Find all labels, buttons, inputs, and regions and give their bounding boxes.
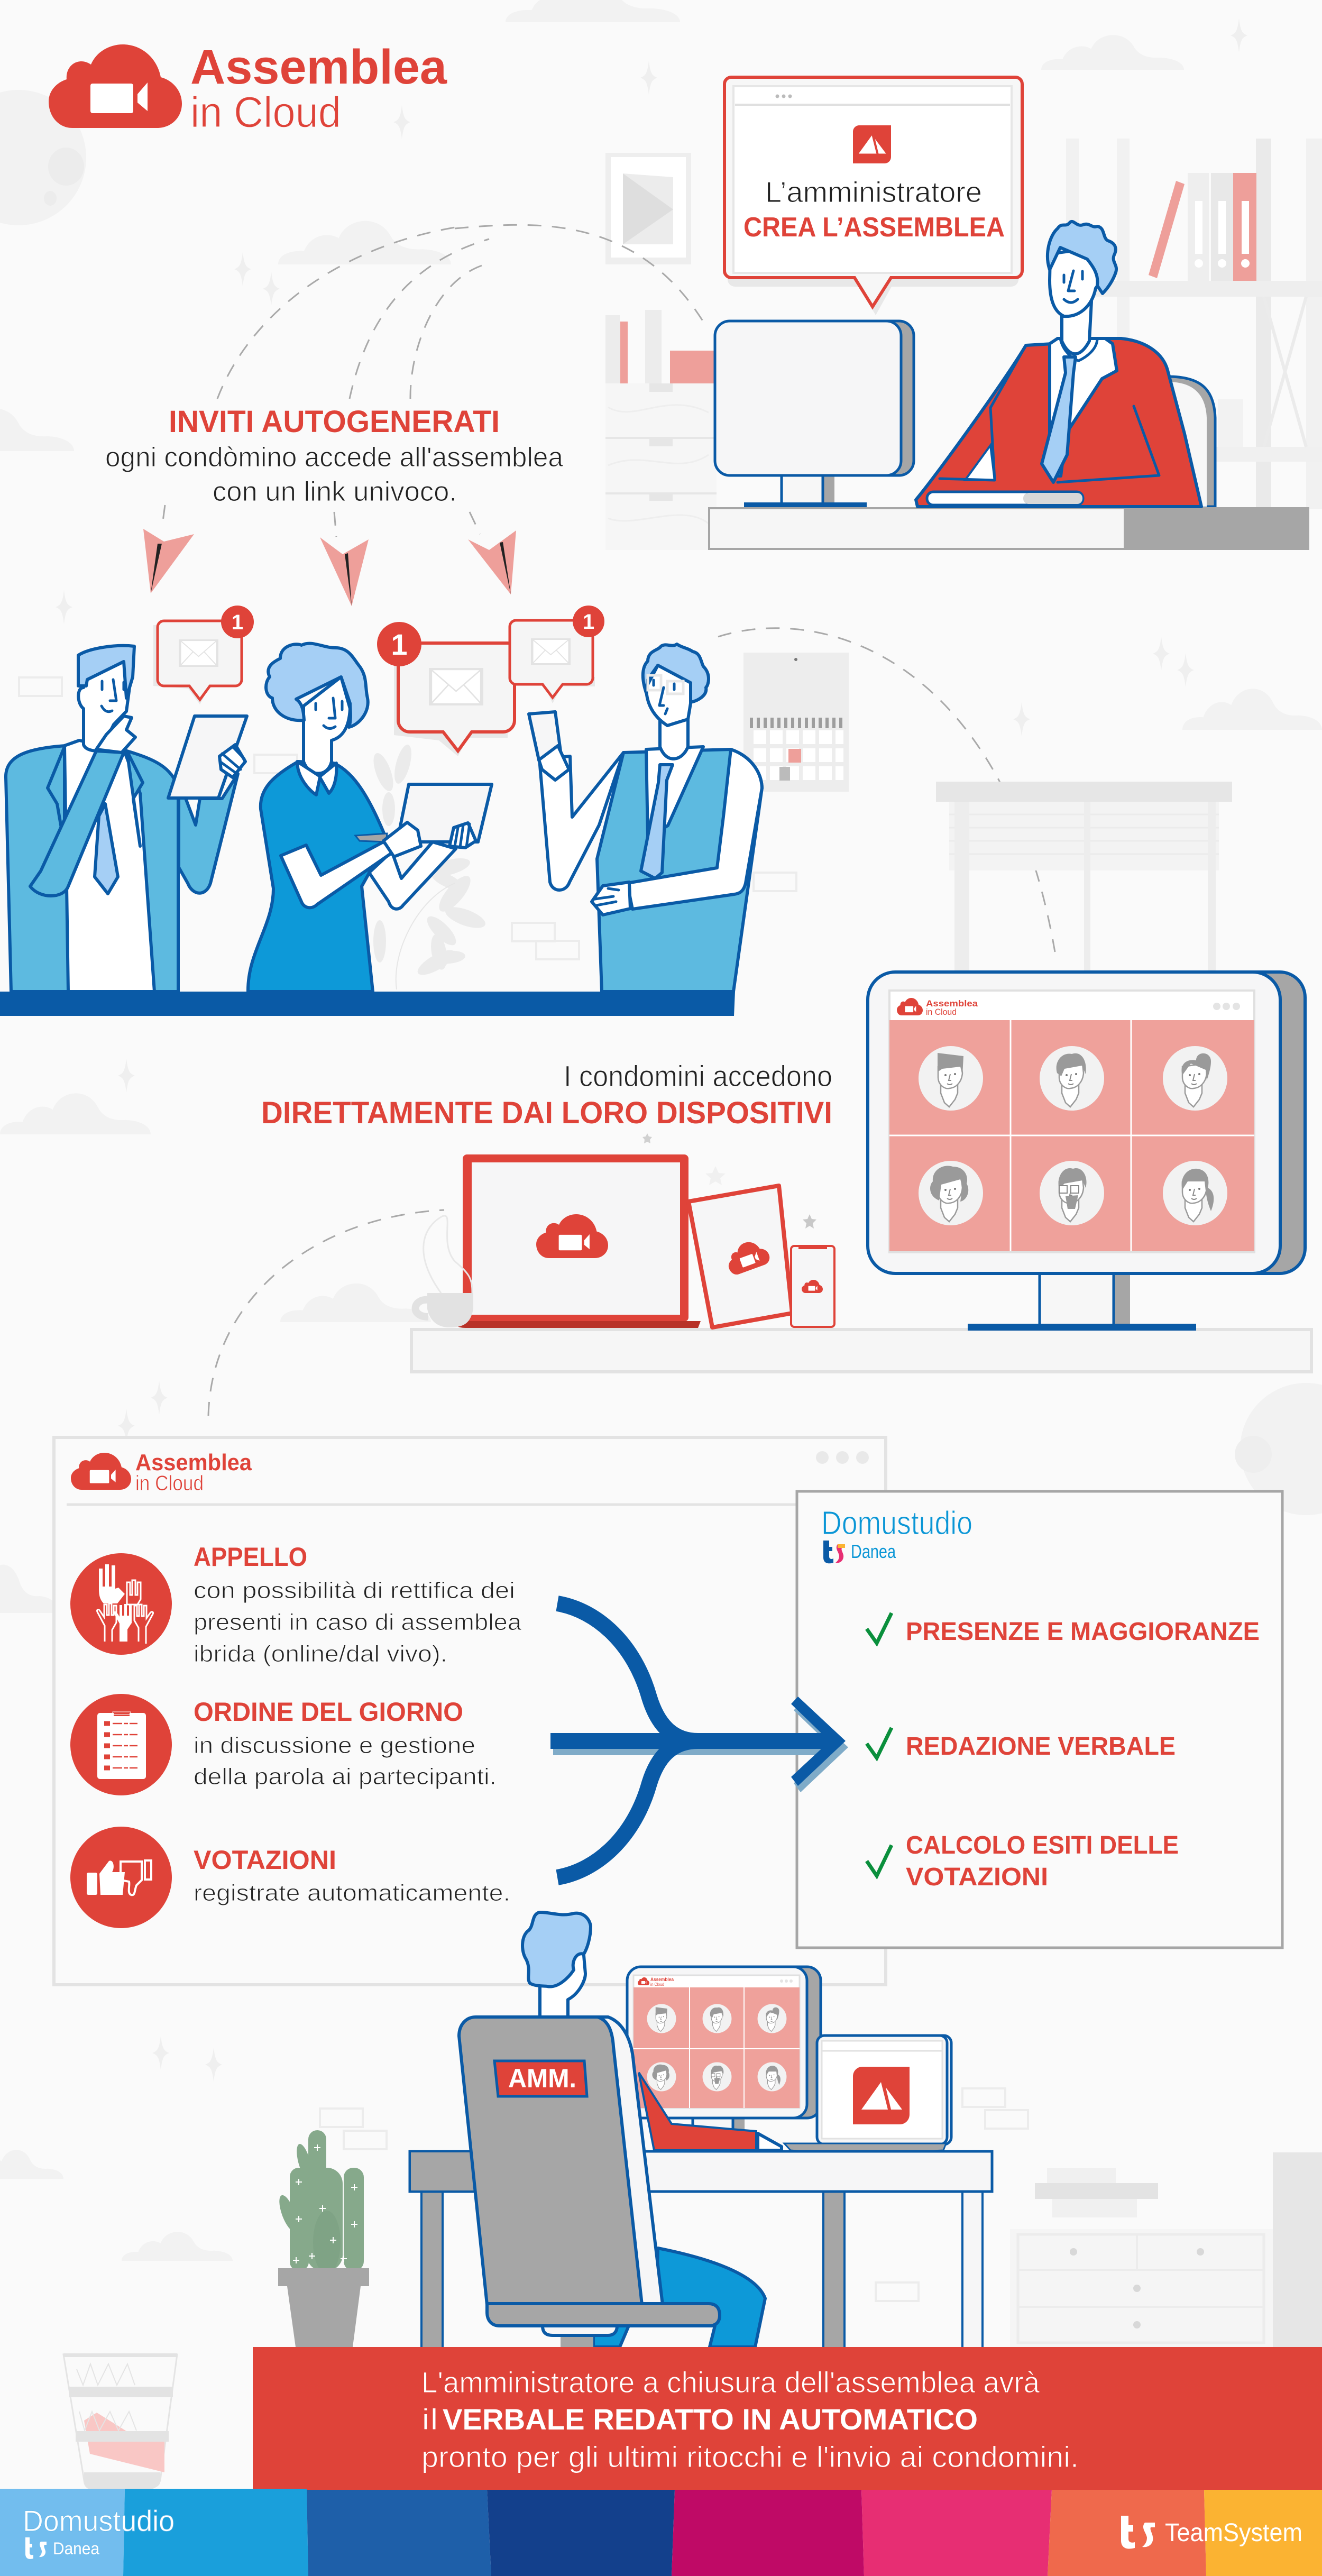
mini logo — [897, 998, 978, 1017]
panel: Assemblea in Cloud window — [54, 1437, 886, 1985]
raised arm — [30, 751, 124, 896]
administrator at desk with monitor — [708, 222, 1309, 550]
arms — [369, 842, 456, 909]
logo: Assemblea in Cloud — [49, 40, 447, 136]
head — [660, 717, 688, 759]
checklist: verbale: REDAZIONE VERBALE — [906, 1732, 1176, 1761]
right arm — [627, 749, 762, 909]
text: devices heading: DIRETTAMENTE DAI LORO DISPOSITIVI — [261, 1096, 832, 1130]
Domustudio logo: Danea — [851, 1541, 896, 1562]
tie — [95, 804, 118, 894]
item: appello: ibrida (online/dal vivo). — [194, 1641, 447, 1667]
item: appello: presenti in caso di assemblea — [194, 1609, 522, 1635]
mini logo: in Cloud — [926, 1007, 957, 1017]
devices: laptop, tablet, phone, cup — [416, 1133, 834, 1328]
item: appello — [194, 1542, 522, 1667]
icon: thumbs up and down — [70, 1827, 172, 1928]
stand — [1039, 1272, 1130, 1325]
icon: raised hands — [70, 1553, 172, 1655]
notification bubble 2 — [377, 622, 515, 756]
tie — [1042, 357, 1076, 482]
right sleeve — [179, 774, 238, 893]
item: appello: con possibilità di rettifica dei — [194, 1578, 515, 1603]
speech bubble: administrator creates assembly — [724, 77, 1022, 315]
neck and hair — [540, 1949, 585, 2017]
desk scene: administrator from behind — [410, 1912, 992, 2348]
item: ordine del giorno: della parola ai partecipanti. — [194, 1764, 497, 1790]
banner text: VERBALE REDATTO IN AUTOMATICO — [443, 2403, 978, 2436]
phone — [529, 712, 562, 760]
logo: Assemblea in Cloud: Assemblea — [190, 40, 447, 94]
mini logo: Assemblea — [926, 998, 978, 1009]
banner text: L'amministratore a chiusura dell'assemblea avrà — [421, 2366, 1040, 2399]
item: ordine del giorno: in discussione e gestione — [194, 1732, 475, 1758]
footer logo: Domustudio Danea: Danea — [53, 2539, 99, 2558]
footer logo: Domustudio Danea: Domustudio — [23, 2504, 175, 2537]
hand — [219, 745, 245, 777]
desk — [708, 507, 1309, 550]
checklist: esiti: VOTAZIONI — [906, 1863, 1048, 1891]
tablet — [397, 784, 492, 842]
monitor — [627, 1967, 821, 2131]
Domustudio logo — [821, 1505, 972, 1563]
phone — [791, 1246, 834, 1327]
notification bubble 1: 1 — [232, 611, 243, 634]
desk — [411, 1330, 1311, 1372]
head — [78, 662, 130, 751]
bubble text: CREA L’ASSEMBLEA — [743, 212, 1005, 243]
trousers — [656, 2248, 765, 2347]
notification bubble 3 — [510, 606, 604, 703]
logo: Assemblea in Cloud: in Cloud — [190, 88, 341, 136]
monitor — [715, 321, 914, 507]
notification bubble 1 — [153, 606, 254, 704]
plant: cactus in pot — [276, 2130, 369, 2347]
item: appello: APPELLO — [194, 1542, 307, 1572]
background plant, calendar and blinds — [370, 653, 1232, 989]
footer logo: TeamSystem: TeamSystem — [1165, 2519, 1302, 2547]
hair — [1048, 222, 1116, 294]
panel logo: Assemblea — [135, 1450, 252, 1475]
banner: closing message — [253, 2347, 1322, 2490]
item: ordine del giorno — [194, 1697, 497, 1790]
banner text: pronto per gli ultimi ritocchi e l'invio ai condomini. — [421, 2440, 1079, 2473]
item: votazioni: registrate automaticamente. — [194, 1880, 510, 1906]
tie — [641, 765, 673, 878]
panel: Domustudio results — [797, 1491, 1282, 1948]
bubble text — [743, 176, 1005, 243]
decorative vase — [63, 2353, 177, 2489]
shirt — [1050, 338, 1117, 476]
notification bubble 2: 1 — [391, 628, 408, 661]
footer logo: Domustudio Danea — [23, 2504, 175, 2559]
person: woman with tablet — [248, 644, 492, 992]
large monitor with video call — [411, 972, 1311, 1372]
desk top — [410, 2151, 992, 2192]
chair — [1168, 377, 1215, 507]
person: man with phone — [529, 644, 762, 992]
cup — [416, 1216, 473, 1327]
icon: paper planes — [143, 529, 516, 606]
banner text — [421, 2366, 1079, 2473]
sleeves and keyboard — [965, 445, 995, 480]
screen — [1031, 972, 1305, 1273]
tablet — [168, 716, 247, 798]
tablet — [688, 1186, 792, 1327]
table legs — [421, 2192, 983, 2348]
chair — [459, 2017, 720, 2326]
footer logo: TeamSystem — [1121, 2516, 1302, 2549]
checklist: esiti: CALCOLO ESITI DELLE — [906, 1831, 1179, 1859]
banner text: il — [421, 2403, 438, 2436]
seat stem — [561, 2335, 593, 2348]
Domustudio logo: Domustudio — [821, 1505, 972, 1542]
invite heading text: ogni condòmino accede all'assemblea — [105, 442, 563, 473]
arm — [639, 2073, 782, 2150]
bubble text: L’amministratore — [765, 176, 982, 208]
panel logo: in Cloud — [135, 1472, 204, 1495]
item: votazioni — [194, 1845, 510, 1906]
footer colour stripes — [0, 2489, 1322, 2576]
participants grid — [889, 1020, 1254, 1251]
icon: sail — [853, 125, 891, 163]
item: ordine del giorno: ORDINE DEL GIORNO — [194, 1697, 463, 1727]
neck and face — [1062, 301, 1091, 354]
monitor: in Cloud — [650, 1982, 664, 1987]
person: man with tablet — [6, 646, 247, 992]
text: devices heading: I condomini accedono — [564, 1059, 832, 1093]
text: devices heading — [261, 1059, 832, 1130]
arrow: merging flows — [550, 1603, 848, 1877]
jacket — [916, 338, 1201, 507]
laptop — [453, 1154, 701, 1328]
laptop — [784, 2036, 951, 2152]
background: dresser, printer, side panel — [1010, 2152, 1322, 2347]
icon: checklist — [70, 1694, 172, 1795]
panel logo — [71, 1450, 252, 1495]
invite heading text: con un link univoco. — [213, 476, 457, 507]
monitor: Assemblea — [650, 1977, 674, 1982]
background office furniture: picture frame, bookshelf, dresser — [605, 139, 1322, 550]
invite heading text — [105, 405, 563, 507]
item: votazioni: VOTAZIONI — [194, 1845, 336, 1875]
badge: AMM.: AMM. — [508, 2064, 576, 2093]
badge: AMM. — [494, 2061, 587, 2096]
floor bar — [0, 992, 735, 1016]
raised arm — [539, 753, 623, 890]
dashed invite trajectories — [162, 225, 1055, 1416]
invite heading text: INVITI AUTOGENERATI — [169, 405, 500, 439]
checklist: esiti — [867, 1831, 1179, 1891]
notification bubble 3: 1 — [583, 610, 594, 634]
checklist: presenze: PRESENZE E MAGGIORANZE — [906, 1618, 1260, 1646]
